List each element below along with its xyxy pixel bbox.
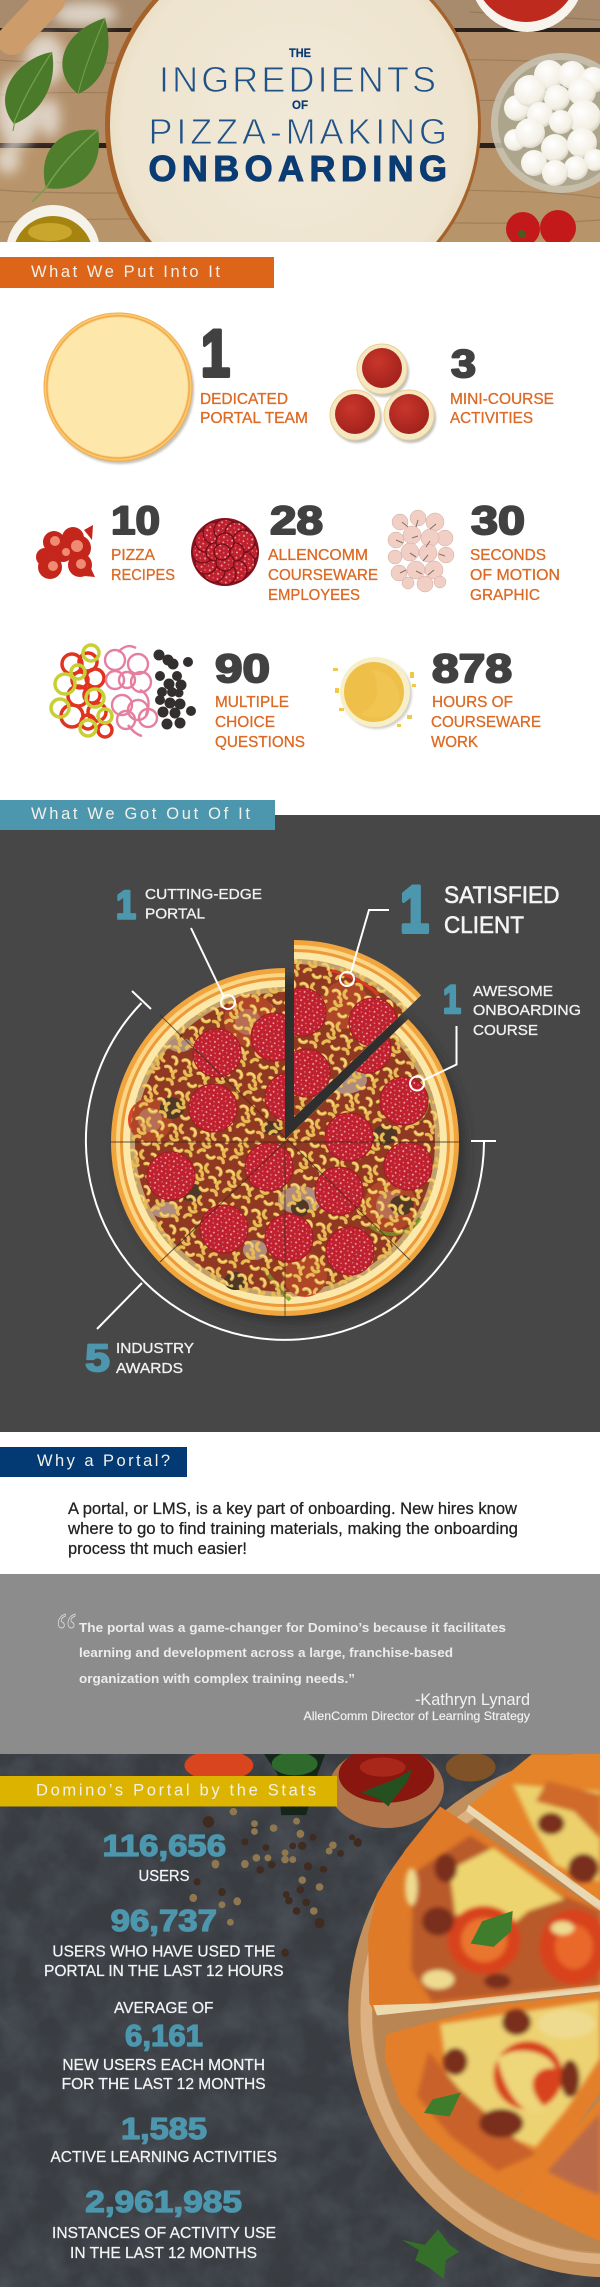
stat: active learning activities: 1,585 bbox=[121, 2111, 207, 2146]
panel: ingredients bbox=[36, 312, 560, 751]
callout: industry awards bbox=[85, 1283, 194, 1380]
stat: hours of courseware work bbox=[431, 647, 541, 751]
parsley on table bbox=[402, 2229, 459, 2279]
callout: cutting-edge portal: PORTAL bbox=[145, 906, 205, 922]
quote text: organization with complex training needs.” bbox=[79, 1671, 355, 1686]
basil leaves bbox=[5, 18, 109, 202]
melted toppings bbox=[405, 1781, 600, 2195]
stat: dedicated portal team: DEDICATED bbox=[200, 391, 288, 408]
stat: users last 12 hours: PORTAL IN THE LAST 12 HOURS bbox=[44, 1963, 284, 1980]
stat: seconds of motion graphic bbox=[470, 499, 560, 604]
stat: courseware employees: 28 bbox=[270, 499, 323, 543]
stat: hours of courseware work: WORK bbox=[431, 734, 479, 751]
quote attribution: -Kathryn Lynard bbox=[415, 1691, 530, 1709]
title: ONBOARDING bbox=[148, 148, 447, 189]
stat: new users each month bbox=[62, 2000, 266, 2093]
stat: instances of activity use: 2,961,985 bbox=[85, 2184, 242, 2219]
stat: new users each month: FOR THE LAST 12 MONTHS bbox=[62, 2076, 266, 2093]
stat: mini-course activities: 3 bbox=[451, 343, 476, 386]
callout: industry awards: 5 bbox=[85, 1337, 110, 1380]
callout: industry awards: INDUSTRY bbox=[116, 1341, 194, 1357]
stat: users: 116,656 bbox=[102, 1828, 226, 1863]
stat: dedicated portal team: 1 bbox=[201, 316, 230, 390]
tomato sauce bowl bbox=[470, 0, 584, 32]
pizza with slice removed bbox=[110, 940, 468, 1322]
quote attribution: AllenComm Director of Learning Strategy bbox=[304, 1709, 530, 1723]
cherry tomatoes bbox=[506, 210, 576, 242]
rolling pin bbox=[12, 0, 50, 40]
stat: new users each month: NEW USERS EACH MONTH bbox=[62, 2057, 265, 2074]
stat: multiple choice questions bbox=[215, 647, 305, 751]
stat: pizza recipes: RECIPES bbox=[111, 567, 175, 584]
stat: mini-course activities: MINI-COURSE bbox=[450, 391, 554, 408]
icon: grated cheese bbox=[333, 657, 416, 729]
stat: seconds of motion graphic: OF MOTION bbox=[470, 567, 560, 584]
title: OF bbox=[292, 98, 308, 112]
stat: pizza recipes: 10 bbox=[111, 499, 160, 543]
section heading: what we put into it: What We Put Into It bbox=[31, 263, 220, 281]
section heading: why a portal bbox=[0, 1447, 187, 1477]
callout: awesome onboarding course: COURSE bbox=[473, 1023, 538, 1039]
icon: tomato slices bbox=[36, 525, 95, 579]
callout: awesome onboarding course: AWESOME bbox=[473, 984, 553, 1000]
stat: multiple choice questions: CHOICE bbox=[215, 714, 275, 731]
stat: users: USERS bbox=[138, 1868, 190, 1885]
stat: multiple choice questions: 90 bbox=[215, 647, 270, 691]
icon: mushrooms bbox=[388, 510, 454, 592]
stat: active learning activities bbox=[50, 2117, 276, 2162]
parsley on pizza bbox=[424, 1911, 513, 2116]
callout: industry awards: AWARDS bbox=[116, 1361, 183, 1377]
stat: multiple choice questions: QUESTIONS bbox=[215, 734, 305, 751]
panel: quote bbox=[0, 1574, 600, 1754]
stat: pizza recipes: PIZZA bbox=[111, 547, 156, 564]
stat: seconds of motion graphic: 30 bbox=[471, 499, 525, 543]
icon: quotation mark: “ bbox=[56, 1602, 77, 1662]
sauce bowls bbox=[329, 1747, 496, 1828]
stat: users last 12 hours: USERS WHO HAVE USED THE bbox=[52, 1944, 275, 1960]
stat: active learning activities: ACTIVE LEARNING ACTIVITIES bbox=[50, 2149, 277, 2166]
section heading: what we got out of it bbox=[0, 800, 275, 830]
removed slice bbox=[294, 940, 422, 1117]
callout: awesome onboarding course: ONBOARDING bbox=[473, 1003, 581, 1019]
stat: mini-course activities: ACTIVITIES bbox=[450, 410, 533, 427]
bracket arc around pizza bbox=[86, 991, 496, 1340]
stat: multiple choice questions: MULTIPLE bbox=[215, 694, 289, 711]
stat: hours of courseware work: COURSEWARE bbox=[431, 714, 541, 731]
dough bbox=[110, 0, 478, 242]
wooden board bbox=[348, 1751, 600, 2277]
text block: why a portal bbox=[67, 1500, 518, 1558]
section heading: what we got out of it: What We Got Out Of It bbox=[31, 805, 250, 823]
quote text bbox=[79, 1620, 506, 1686]
icon: sauce cups bbox=[330, 344, 436, 443]
title: INGREDIENTS bbox=[159, 59, 436, 100]
text block: why a portal: A portal, or LMS, is a key part of onboarding. New hires know bbox=[68, 1500, 517, 1518]
callout: satisfied client: 1 bbox=[400, 872, 429, 946]
stat: instances of activity use: IN THE LAST 12 MONTHS bbox=[70, 2245, 257, 2262]
section heading: why a portal: Why a Portal? bbox=[37, 1452, 170, 1470]
stat: mini-course activities bbox=[450, 343, 554, 427]
stat: pizza recipes bbox=[111, 499, 175, 584]
stat: courseware employees: EMPLOYEES bbox=[268, 587, 360, 604]
text block: why a portal: process tht much easier! bbox=[68, 1540, 247, 1558]
peppercorns bbox=[189, 1808, 362, 1957]
stat: seconds of motion graphic: GRAPHIC bbox=[470, 587, 540, 604]
pizza shadow bbox=[120, 978, 464, 1322]
section heading: domino's portal by the stats bbox=[0, 1776, 337, 1806]
mozzarella bowl bbox=[491, 53, 600, 193]
panel: what we got out of it bbox=[0, 800, 600, 1432]
pizza slices bbox=[368, 1754, 600, 2241]
icon: pizza base bbox=[44, 312, 194, 464]
text block: why a portal: where to go to find training materials, making the onboarding bbox=[67, 1520, 518, 1538]
panel: portal stats photo bbox=[0, 1747, 600, 2287]
callout: awesome onboarding course bbox=[410, 978, 581, 1090]
stat: courseware employees: COURSEWARE bbox=[268, 567, 378, 584]
tomato and parsley bbox=[184, 1750, 325, 1815]
icon: peppers onions olives bbox=[51, 645, 196, 737]
stat: instances of activity use bbox=[53, 2190, 276, 2258]
stat: hours of courseware work: 878 bbox=[432, 647, 512, 691]
callout: cutting-edge portal: 1 bbox=[116, 884, 136, 928]
stat: instances of activity use: INSTANCES OF ACTIVITY USE bbox=[52, 2225, 276, 2242]
callout: cutting-edge portal: CUTTING-EDGE bbox=[145, 887, 262, 903]
callout: awesome onboarding course: 1 bbox=[443, 978, 461, 1022]
section heading: what we put into it bbox=[0, 257, 274, 288]
stat: dedicated portal team: PORTAL TEAM bbox=[200, 410, 308, 427]
pizza body bbox=[110, 968, 460, 1316]
callout: satisfied client: CLIENT bbox=[444, 912, 524, 939]
quote text: The portal was a game-changer for Domino’s because it facilitates bbox=[79, 1620, 506, 1635]
stat: dedicated portal team bbox=[200, 316, 308, 427]
section heading: domino's portal by the stats: Domino’s Portal by the Stats bbox=[36, 1782, 316, 1800]
stat: users last 12 hours bbox=[45, 1909, 283, 1976]
olive oil bowl bbox=[7, 205, 99, 242]
wooden peel board bbox=[105, 0, 481, 242]
stat: users last 12 hours: 96,737 bbox=[111, 1903, 217, 1938]
flour dusting bbox=[0, 2, 117, 174]
icon: pepperoni stack bbox=[191, 518, 259, 586]
quote attribution bbox=[304, 1691, 530, 1723]
slice cut lines bbox=[110, 1015, 460, 1316]
callout: satisfied client bbox=[340, 872, 560, 986]
stat: new users each month: 6,161 bbox=[125, 2018, 203, 2053]
stat: courseware employees bbox=[268, 499, 378, 604]
hero photo banner bbox=[0, 0, 600, 242]
stat: seconds of motion graphic: SECONDS bbox=[470, 547, 546, 564]
quote text: learning and development across a large, franchise-based bbox=[79, 1645, 453, 1660]
stat: hours of courseware work: HOURS OF bbox=[432, 694, 513, 711]
callout: satisfied client: SATISFIED bbox=[444, 882, 560, 909]
pepperoni bbox=[147, 1013, 432, 1275]
callout: cutting-edge portal bbox=[116, 884, 262, 1009]
stat: courseware employees: ALLENCOMM bbox=[268, 547, 368, 564]
title: THE bbox=[289, 46, 311, 60]
stat: users bbox=[104, 1834, 226, 1882]
title: PIZZA-MAKING bbox=[148, 111, 447, 152]
title bbox=[148, 46, 447, 189]
stat: new users each month: AVERAGE OF bbox=[114, 2000, 214, 2017]
